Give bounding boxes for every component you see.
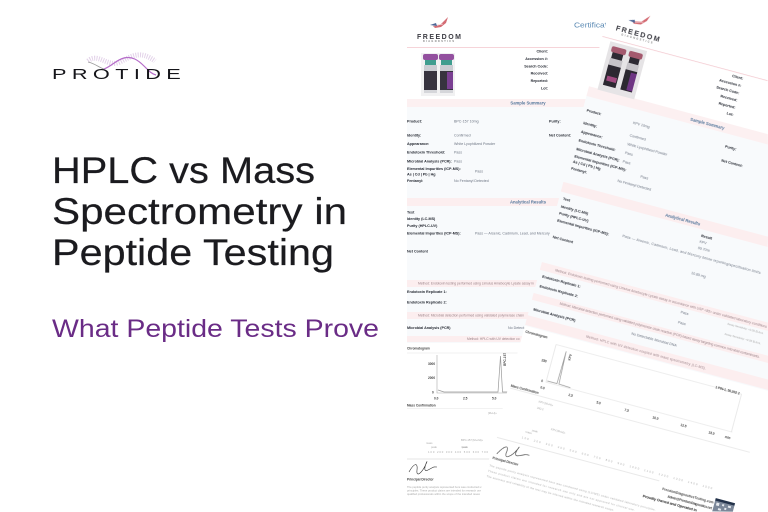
result values: Pass — Arsenic, Cadmium, Lead, and Mercury below reporting/specification limits xyxy=(622,234,761,275)
field values: KPV 10mg xyxy=(633,121,650,129)
chart label: Chromatogram xyxy=(525,330,548,340)
client details labels: Search Code: xyxy=(716,85,740,95)
result labels: Endotoxin Replicate 2: xyxy=(539,284,578,298)
result labels xyxy=(407,210,461,330)
chart tick labels: 2000 xyxy=(428,376,435,380)
result values xyxy=(598,220,765,364)
field labels: Fentanyl: xyxy=(407,179,423,183)
field labels: Microbial Analysis (PCR): xyxy=(407,160,452,164)
field labels: Identity: xyxy=(583,121,598,129)
method notes: Method: Microbial detection performed using validated polymerase chain reaction (PCR)-based assay targeting common microbial contaminants. xyxy=(559,302,760,359)
field values: White Lyophilized Powder xyxy=(454,142,496,146)
logo: Protide xyxy=(52,55,186,82)
chart tick labels: 2.5 xyxy=(463,396,468,400)
sample summary section xyxy=(407,100,571,183)
chart axes and peak xyxy=(407,353,520,393)
page one brand logo xyxy=(417,17,461,43)
result labels: Endotoxin Replicate 1: xyxy=(407,290,447,294)
chart: chromatogram xyxy=(512,330,744,440)
signature xyxy=(409,462,437,474)
client details labels: Client: xyxy=(537,50,548,54)
field labels: Elemental Impurities (ICP-MS): xyxy=(574,154,627,172)
client details labels: Lot: xyxy=(726,111,734,117)
field labels xyxy=(571,108,747,213)
field values: Confirmed xyxy=(629,134,646,142)
footer contact lines: Proudly Owned and Operated in xyxy=(642,494,698,512)
chart axis labels: 0 xyxy=(541,379,544,383)
field labels: Elemental Impurities (ICP-MS): xyxy=(407,167,461,171)
mass peak labels: peak xyxy=(431,445,437,449)
client details labels: Received: xyxy=(720,94,738,103)
chart axis labels: 10.0 xyxy=(652,416,659,421)
client details labels: Search Code: xyxy=(524,64,548,68)
assay sensitivity notes xyxy=(724,322,764,346)
mass axis ticks: 100 200 300 400 500 600 700 xyxy=(428,450,488,454)
result labels: Elemental Impurities (ICP-MS): xyxy=(557,219,610,236)
brand tagline: DIAGNOSTICS xyxy=(423,40,454,43)
result values: Pass xyxy=(677,320,686,326)
product photo: vials xyxy=(421,53,455,96)
client details labels: Accession #: xyxy=(525,57,548,61)
chart label: Chromatogram xyxy=(407,346,430,350)
chart tick labels: 0 xyxy=(432,390,434,394)
mass peak labels: mass xyxy=(461,446,468,449)
mass peak labels xyxy=(525,398,572,444)
mass peak labels: BPC-157 [M+2H]+ xyxy=(461,438,483,442)
field values: Pass xyxy=(622,160,631,166)
disclaimer text: These product claims are intended for research use only and are not approved for clinical use. xyxy=(488,469,636,512)
icon: QR code xyxy=(712,498,735,512)
field labels: Fentanyl: xyxy=(571,166,588,175)
chart axis labels: 15.0 xyxy=(708,431,715,436)
chart axis labels: 1 PIN-1, 50,002 2 xyxy=(715,385,740,396)
chart tick labels xyxy=(428,362,497,400)
method notes xyxy=(540,269,768,383)
field values: Pass xyxy=(625,151,633,157)
field labels: Product: xyxy=(586,109,602,116)
field labels: Purity: xyxy=(549,120,561,124)
result labels: Identity (LC-MS) xyxy=(407,217,436,221)
field values: White Lyophilized Powder xyxy=(627,142,668,157)
footer contact lines xyxy=(642,483,715,512)
chart axis labels: 2.5 xyxy=(568,393,573,398)
logo wordmark: PROTIDE xyxy=(52,65,186,82)
disclaimer text: The accuracy and reliability of the test may be inferred within the intended research scope. xyxy=(486,474,615,512)
field labels: Appearance: xyxy=(580,130,603,139)
mass axis ticks: 100 200 300 400 500 600 700 800 900 1000 1100 1200 1300 1400 1500 xyxy=(521,435,713,490)
chart axis labels: 5.0 xyxy=(596,401,601,406)
chart axis labels: 0.0 xyxy=(540,385,545,391)
chart: mass confirmation xyxy=(407,404,505,454)
chart tick labels: 5.0 xyxy=(492,396,497,400)
result labels: Test xyxy=(562,197,571,203)
result labels: Net Content xyxy=(407,250,429,254)
signature xyxy=(497,442,531,462)
chart axis labels: 250 xyxy=(541,358,547,364)
result values xyxy=(475,232,550,330)
analytical results section xyxy=(530,186,768,383)
field labels: Net Content: xyxy=(549,134,571,138)
field labels: Identity: xyxy=(407,134,421,138)
field labels: Microbial Analysis (PCR): xyxy=(576,147,620,163)
chart axis labels: 7.5 xyxy=(624,408,629,413)
signatory: Principal Director xyxy=(407,478,434,482)
chart frame and peak xyxy=(546,345,742,432)
client details labels: Client: xyxy=(732,74,744,81)
field values: Pass xyxy=(640,175,649,181)
assay sensitivity notes: Assay Sensitivity: <0.05 EU/mL xyxy=(724,332,762,346)
result labels: Endotoxin Replicate 1: xyxy=(542,275,581,289)
mass peak labels: KPV [M+H]+ xyxy=(550,427,566,435)
mass peak labels: peak xyxy=(462,445,468,449)
method notes: Method: Microbial detection performed using validated polymerase chain xyxy=(418,314,524,318)
page two background bands xyxy=(509,36,768,453)
chart: mass confirmation xyxy=(498,384,751,497)
method notes: Method: Endotoxin testing performed using Limulus Amebocyte Lysate assay in accordance with USP <85> under validated laboratory conditions xyxy=(555,269,768,329)
field labels xyxy=(407,120,571,183)
client details labels xyxy=(524,50,548,90)
sample summary section xyxy=(571,90,752,213)
signatory: Principal Director xyxy=(492,456,519,467)
section heading: Sample Summary xyxy=(690,117,726,131)
method notes: Method: Endotoxin testing performed using Limulus Amebocyte Lysate assay in xyxy=(418,282,534,286)
field labels: Purity: xyxy=(725,145,737,151)
title: Spectrometry in xyxy=(52,190,347,232)
field values xyxy=(617,121,674,194)
mass peak labels: mass xyxy=(426,442,433,445)
disclaimer text xyxy=(407,485,550,496)
logo wave graphic xyxy=(88,55,156,75)
field values: Confirmed xyxy=(454,134,471,138)
method notes xyxy=(418,282,534,341)
product photo: vials xyxy=(597,41,647,99)
footer contact lines: FreedomDiagnosticsTesting.com xyxy=(662,487,714,505)
document: certificate page one xyxy=(407,17,612,496)
client details labels: Lot: xyxy=(541,86,548,90)
result values: No Detectable xyxy=(508,326,531,330)
field labels: As | Cd | Pb | Hg xyxy=(572,160,601,171)
mass peak labels xyxy=(426,411,497,449)
assay sensitivity notes: Assay Sensitivity: <0.05 EU/mL xyxy=(727,322,764,335)
signature and disclaimer xyxy=(407,459,550,496)
result labels: Net Content xyxy=(552,235,574,245)
title: HPLC vs Mass xyxy=(52,149,315,191)
field values: Pass xyxy=(454,150,462,154)
method notes: Method: HPLC with UV detection co xyxy=(467,337,520,341)
page one background bands xyxy=(407,47,612,463)
page two sheet xyxy=(475,8,768,512)
result labels: Elemental Impurities (ICP-MS): xyxy=(407,232,461,236)
field labels: Endotoxin Threshold: xyxy=(407,150,445,154)
result labels: Result xyxy=(701,234,713,241)
client details labels xyxy=(710,71,744,117)
brand name: FREEDOM xyxy=(615,23,661,44)
signature and footer xyxy=(486,437,736,512)
mass peak labels: peak xyxy=(532,428,539,434)
field values: Pass xyxy=(454,160,462,164)
field labels: Net Content: xyxy=(721,159,743,168)
disclaimer text: principles. These product claims are intended for research use only and are not approved for clinical use xyxy=(407,488,531,492)
peak label: KPV xyxy=(567,353,573,361)
field values: Pass xyxy=(475,170,483,174)
chart axis labels xyxy=(534,340,743,440)
field labels: Endotoxin Threshold: xyxy=(578,138,616,152)
result values: Pass xyxy=(680,310,689,316)
analytical results section xyxy=(407,200,550,341)
icon: flag wing xyxy=(628,11,650,27)
result labels: Purity (HPLC-UV) xyxy=(407,224,438,228)
mass peak labels: 342.2 xyxy=(537,406,545,412)
chart tick labels: 3000 xyxy=(428,362,435,366)
result labels xyxy=(533,197,713,351)
field values: No Fentanyl Detected xyxy=(454,179,489,183)
client details labels: Accession #: xyxy=(719,78,742,88)
chart: chromatogram xyxy=(407,346,520,400)
result values: No Detectable Microbial DNA xyxy=(631,332,678,348)
mass peak labels: mass xyxy=(525,431,533,435)
field labels: As | Cd | Pb | Hg xyxy=(407,172,436,176)
client details labels: Reported: xyxy=(718,101,736,110)
disclaimer text: The peptide purity analysis represented here was conducted using (LC/MS) under validated laboratory principles. xyxy=(489,463,656,512)
result labels: Microbial Analysis (PCR) xyxy=(407,326,451,330)
result labels: Microbial Analysis (PCR) xyxy=(533,308,577,323)
chart label: Mass Confirmation xyxy=(407,404,436,408)
field labels: Appearance: xyxy=(407,142,429,146)
title: Peptide Testing xyxy=(52,231,334,273)
result labels: Identity (LC-MS) xyxy=(560,205,590,216)
brand tagline: DIAGNOSTICS xyxy=(621,33,653,45)
mass peak labels: [M+H]+ xyxy=(488,411,497,415)
client details labels: Received: xyxy=(531,72,548,76)
result labels: Test xyxy=(407,210,415,214)
result labels: Purity (HPLC-UV) xyxy=(559,211,590,223)
disclaimer text: The peptide purity analysis represented here was conducted using (LC/MS) under validated laboratory xyxy=(407,485,529,489)
chart axis labels: 12.5 xyxy=(680,423,687,429)
subtitle: What Peptide Tests Prove xyxy=(52,315,379,343)
result values: 99.70% xyxy=(697,246,711,253)
icon: flag wing xyxy=(430,17,448,28)
field labels: Product: xyxy=(407,120,422,124)
peak label: BPC-157 xyxy=(503,353,507,366)
certificate heading: Certificat xyxy=(574,20,608,30)
result values: KPV xyxy=(699,240,708,246)
title xyxy=(52,149,347,273)
method notes: Method: HPLC with UV detection coupled with mass spectrometry (LC-MS). xyxy=(586,335,707,371)
footer contact lines: Admin@FreedomDiagnostics.net xyxy=(667,495,713,511)
result values: Pass — Arsenic, Cadmium, Lead, and Mercury xyxy=(475,232,550,236)
client details labels: Reported: xyxy=(531,79,548,83)
chart axis labels: min xyxy=(724,435,731,440)
result labels: Endotoxin Replicate 2: xyxy=(407,300,447,304)
field values: No Fentanyl Detected xyxy=(617,179,652,192)
brand name: FREEDOM xyxy=(417,34,461,41)
chart tick labels: 0.0 xyxy=(434,396,439,400)
document: certificate page two, rotated xyxy=(475,5,768,512)
result values: 10.85 mg xyxy=(691,271,706,279)
disclaimer text: qualified professionals within the scope of the intended research. The accuracy and reliability of the test may be inferred xyxy=(407,492,550,496)
section heading: Analytical Results xyxy=(510,200,547,204)
field values: BPC-157 10mg xyxy=(454,120,479,124)
field values xyxy=(454,120,496,183)
mass peak labels: KPV [M+H]+ xyxy=(538,400,554,407)
section heading: Sample Summary xyxy=(510,100,546,106)
section heading: Analytical Results xyxy=(665,212,701,227)
chart label: Mass Confirmation xyxy=(510,384,539,395)
page two brand logo xyxy=(614,8,665,46)
